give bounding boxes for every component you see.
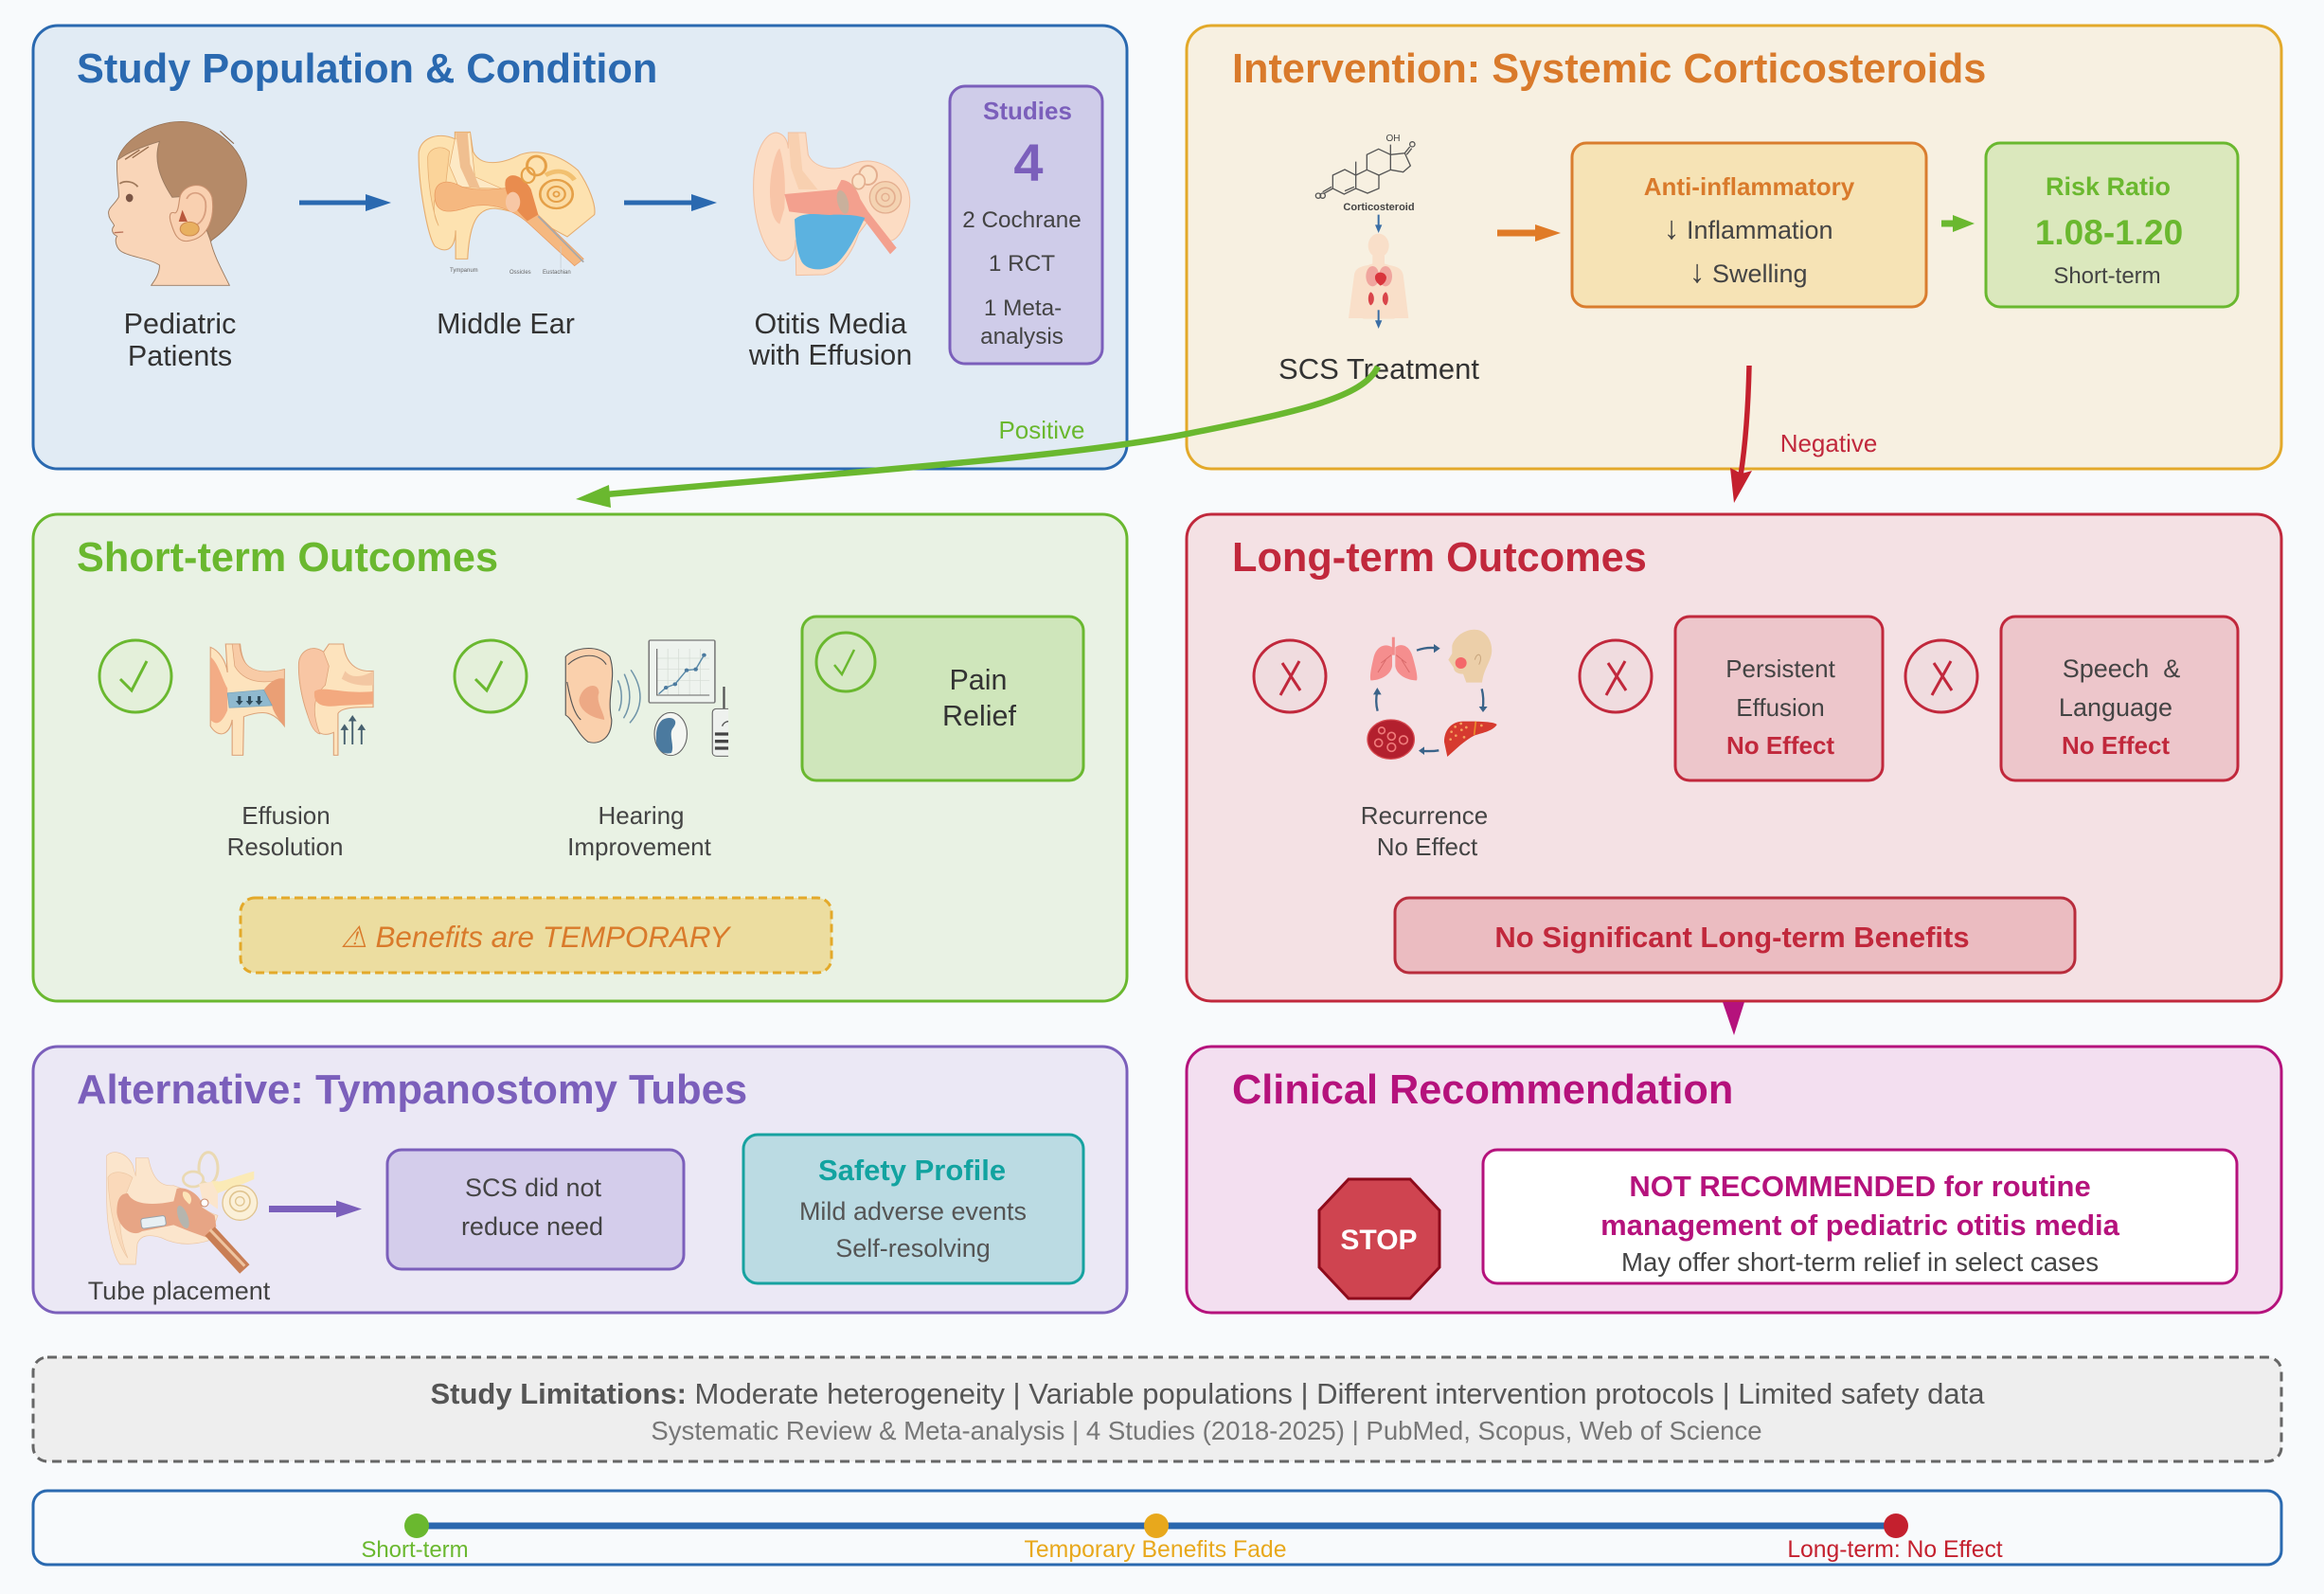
heading: alternative: Alternative: Tympanostomy Tubes	[77, 1067, 747, 1113]
panel: short-term outcomes	[33, 514, 1127, 1001]
icon: check pain relief	[816, 633, 875, 691]
heading: intervention: Intervention: Systemic Corticosteroids	[1232, 46, 1986, 92]
icon: x speech and language	[1905, 640, 1977, 712]
box: anti-inflammatory: ↓ Swelling	[1689, 254, 1808, 290]
panel: study limitations	[33, 1357, 2281, 1461]
box: speech and language: Language	[2059, 693, 2172, 722]
box: speech and language: Speech &	[2063, 654, 2180, 683]
marker: long-term no effect	[1787, 1513, 2003, 1563]
panel: alternative tympanostomy tubes	[33, 1047, 1127, 1313]
panel: long-term outcomes	[1187, 514, 2281, 1001]
timeline	[33, 1491, 2281, 1565]
box: pain relief: Relief	[942, 700, 1017, 732]
icon labels: ear parts: Tympanum	[450, 268, 478, 274]
panel: study limitations: Systematic Review & Meta-analysis | 4 Studies (2018-2025) | PubMed, Scopus, Web of Science	[651, 1416, 1762, 1445]
callout: studies count: 2 Cochrane	[962, 207, 1082, 233]
icon: x recurrence	[1254, 640, 1326, 712]
box: risk ratio: 1.08-1.20	[2035, 213, 2183, 252]
panel: study population and condition	[33, 26, 1127, 469]
icon: x persistent effusion	[1580, 640, 1652, 712]
box: SCS did not reduce need	[387, 1150, 684, 1269]
heading: long-term outcomes: Long-term Outcomes	[1232, 535, 1647, 581]
marker: temporary benefits fade: Temporary Benefits Fade	[1024, 1537, 1287, 1563]
icon: stop sign	[1319, 1179, 1439, 1298]
icon labels: molecule text	[1343, 134, 1415, 213]
marker: long-term no effect: Long-term: No Effect	[1787, 1537, 2003, 1563]
label: middle ear: Middle Ear	[437, 308, 575, 340]
box: persistent effusion: No Effect	[1726, 731, 1834, 760]
arrow: treatment to short-term outcomes	[576, 367, 1378, 508]
box: safety profile	[743, 1135, 1083, 1283]
box: pain relief: Pain	[949, 664, 1008, 696]
box: safety profile: Mild adverse events	[799, 1197, 1027, 1226]
icon: recurrence cycle	[1368, 630, 1497, 759]
panel: intervention systemic corticosteroids	[1187, 26, 2281, 469]
arrow: treatment to long-term outcomes	[1730, 366, 1752, 503]
icon: child head	[109, 121, 246, 285]
box: not recommended: management of pediatric otitis media	[1600, 1209, 2120, 1242]
callout: studies count: 1 RCT	[989, 251, 1055, 277]
marker: temporary benefits fade	[1024, 1513, 1287, 1563]
label: positive: Positive	[998, 416, 1085, 444]
arrow: treatment to mechanism	[1497, 224, 1561, 242]
icon labels: ear parts: Ossicles	[509, 270, 531, 276]
icon: check hearing	[455, 640, 527, 712]
icon: corticosteroid molecule and body	[1315, 142, 1415, 329]
panel: study limitations: Study Limitations: Moderate heterogeneity | Variable populations | Different intervention protocols | Limited safety data	[431, 1377, 1985, 1410]
arrow: middle ear to otitis media	[624, 194, 717, 211]
label: recurrence no effect: Recurrence	[1361, 801, 1488, 830]
icon: stop sign: STOP	[1340, 1225, 1418, 1256]
box: safety profile: Self-resolving	[835, 1234, 991, 1263]
icon: ear with tube	[107, 1153, 258, 1269]
box: not recommended: NOT RECOMMENDED for routine	[1629, 1170, 2091, 1203]
label: effusion resolution: Effusion	[241, 801, 331, 830]
box: speech and language: No Effect	[2062, 731, 2170, 760]
label: hearing improvement: Hearing	[598, 801, 685, 830]
box: persistent effusion	[1675, 617, 1883, 780]
icon: middle ear anatomy	[419, 132, 595, 268]
box: SCS did not reduce need: reduce need	[461, 1212, 603, 1241]
callout: studies count: 1 Meta-	[984, 296, 1062, 321]
box: safety profile: Safety Profile	[818, 1154, 1006, 1187]
icon: ear with effusion	[754, 133, 910, 276]
heading: short-term outcomes: Short-term Outcomes	[77, 535, 498, 581]
box: anti-inflammatory: ↓ Inflammation	[1663, 210, 1833, 246]
arrow: mechanism to risk ratio	[1941, 215, 1975, 232]
label: tube placement: Tube placement	[88, 1277, 271, 1305]
arrow: patients to middle ear	[299, 194, 391, 211]
label: pediatric patients: Patients	[128, 340, 232, 372]
icon labels: molecule text: OH	[1386, 134, 1400, 144]
label: negative: Negative	[1780, 429, 1877, 457]
heading: study population: Study Population & Condition	[77, 46, 657, 92]
icon: hearing improvement	[565, 640, 728, 756]
callout: no significant long-term benefits	[1395, 898, 2075, 973]
box: risk ratio: Risk Ratio	[2046, 172, 2171, 201]
icon labels: molecule text: Corticosteroid	[1343, 202, 1415, 213]
callout: studies count: Studies	[983, 97, 1072, 125]
callout: benefits are temporary: ⚠ Benefits are TEMPORARY	[341, 921, 731, 954]
box: pain relief	[802, 617, 1083, 780]
label: recurrence no effect: No Effect	[1377, 833, 1478, 861]
label: pediatric patients: Pediatric	[124, 308, 236, 340]
icon: check effusion	[99, 640, 171, 712]
box: not recommended: May offer short-term relief in select cases	[1621, 1247, 2099, 1277]
box: persistent effusion: Effusion	[1736, 693, 1825, 722]
arrow: tubes to box	[269, 1201, 362, 1218]
label: hearing improvement: Improvement	[567, 833, 712, 861]
callout: studies count	[950, 86, 1102, 364]
box: anti-inflammatory	[1572, 143, 1926, 307]
box: speech and language	[2001, 617, 2238, 780]
box: risk ratio: Short-term	[2053, 263, 2161, 289]
heading: clinical recommendation: Clinical Recommendation	[1232, 1067, 1733, 1113]
callout: studies count: 4	[1013, 133, 1044, 192]
callout: benefits are temporary	[241, 898, 831, 973]
marker: short-term: Short-term	[361, 1537, 469, 1563]
box: persistent effusion: Persistent	[1725, 654, 1836, 683]
label: SCS treatment: SCS Treatment	[1278, 352, 1479, 385]
icon: effusion resolution ears	[210, 644, 373, 755]
arrow: long-term to recommendation	[1723, 1002, 1744, 1035]
label: otitis media with effusion: with Effusion	[748, 339, 912, 371]
icon labels: ear parts	[450, 268, 571, 276]
callout: studies count: analysis	[980, 324, 1064, 349]
marker: short-term	[361, 1513, 469, 1563]
box: anti-inflammatory: Anti-inflammatory	[1644, 172, 1855, 201]
box: not recommended	[1483, 1150, 2237, 1283]
panel: clinical recommendation	[1187, 1047, 2281, 1313]
icon labels: ear parts: Eustachian	[543, 270, 571, 276]
label: effusion resolution: Resolution	[227, 833, 343, 861]
label: otitis media with effusion: Otitis Media	[754, 308, 907, 340]
callout: no significant long-term benefits: No Significant Long-term Benefits	[1494, 921, 1970, 954]
box: risk ratio	[1986, 143, 2238, 307]
box: SCS did not reduce need: SCS did not	[465, 1173, 602, 1202]
